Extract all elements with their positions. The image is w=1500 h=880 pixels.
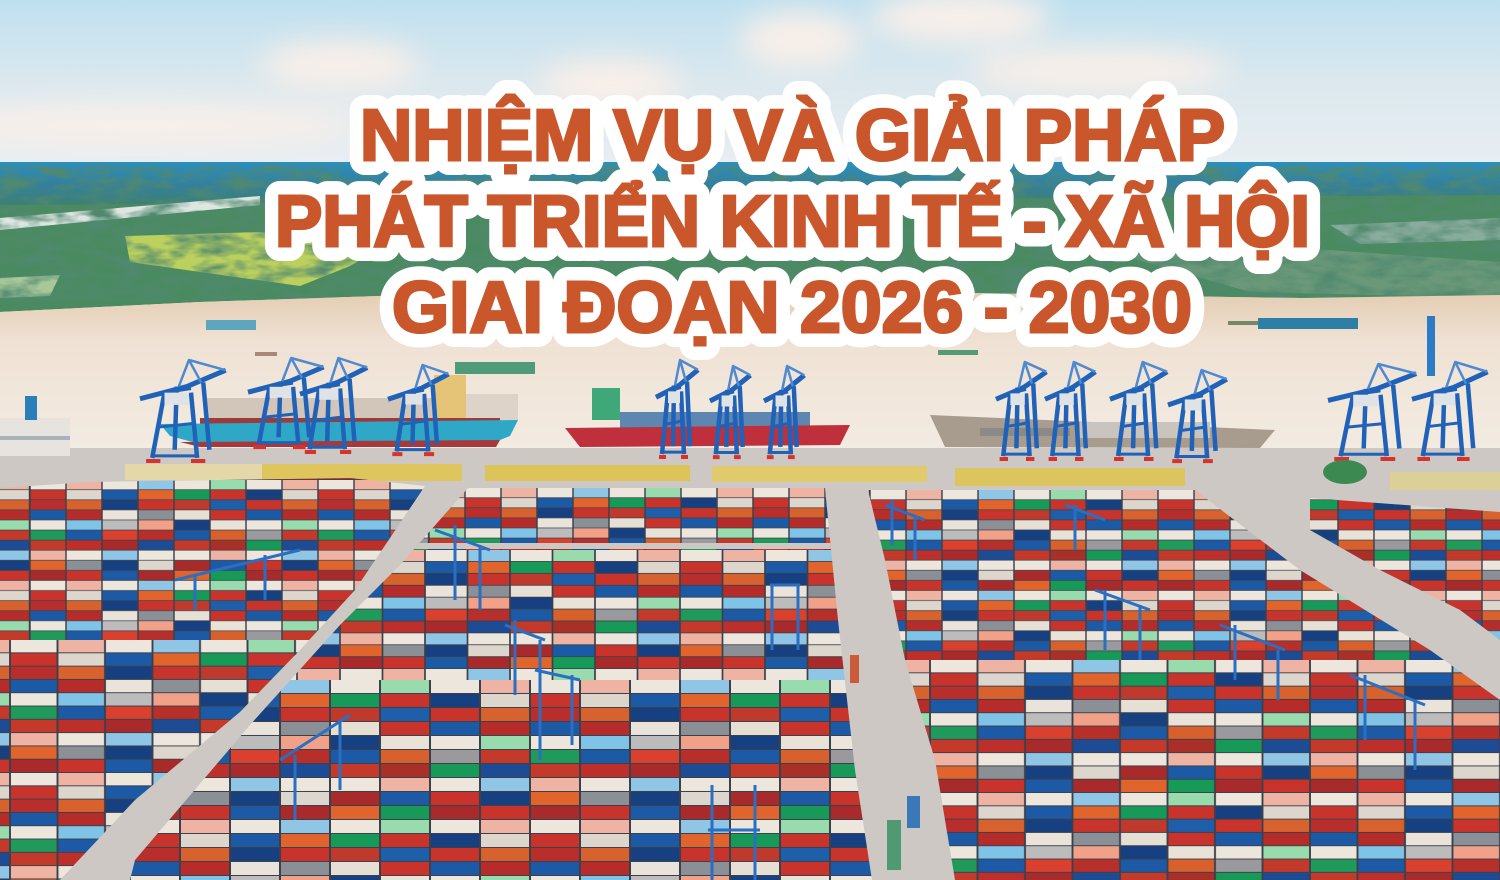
ship: Maersk container vessel [160,375,518,447]
trees beside far right block [1323,460,1367,484]
container yard: far right block [1310,498,1500,640]
title lettering: NHIỆM VỤ VÀ GIẢI PHÁP [360,95,1225,176]
small boats on river [206,318,1358,374]
trucks on the road [850,655,920,870]
ship: grey cargo vessel [930,415,1275,448]
title halo [275,95,1310,348]
river [0,292,1500,460]
container yard: left [0,470,440,880]
title lettering: GIAI ĐOẠN 2026 - 2030 [392,268,1192,348]
yard cranes [175,500,1425,880]
gantry cranes [140,316,1488,461]
yellow ponds along the quay [125,464,1500,490]
container yard: centre [120,480,880,880]
title [275,95,1310,348]
title halo: NHIỆM VỤ VÀ GIẢI PHÁP [360,95,1225,176]
title lettering: PHÁT TRIỂN KINH TẾ - XÃ HỘI [275,181,1310,262]
green riverbank land [0,165,1500,312]
title lettering [275,95,1310,348]
title halo: GIAI ĐOẠN 2026 - 2030 [392,268,1192,348]
sky [0,0,1500,164]
ship: left white vessel [0,396,70,456]
title halo: PHÁT TRIỂN KINH TẾ - XÃ HỘI [275,181,1310,262]
ship: red cargo vessel [565,388,850,447]
clouds [0,0,1230,147]
container yard: right [860,480,1500,880]
distant land and horizon [0,162,1500,212]
quay and yard ground [0,448,1500,880]
